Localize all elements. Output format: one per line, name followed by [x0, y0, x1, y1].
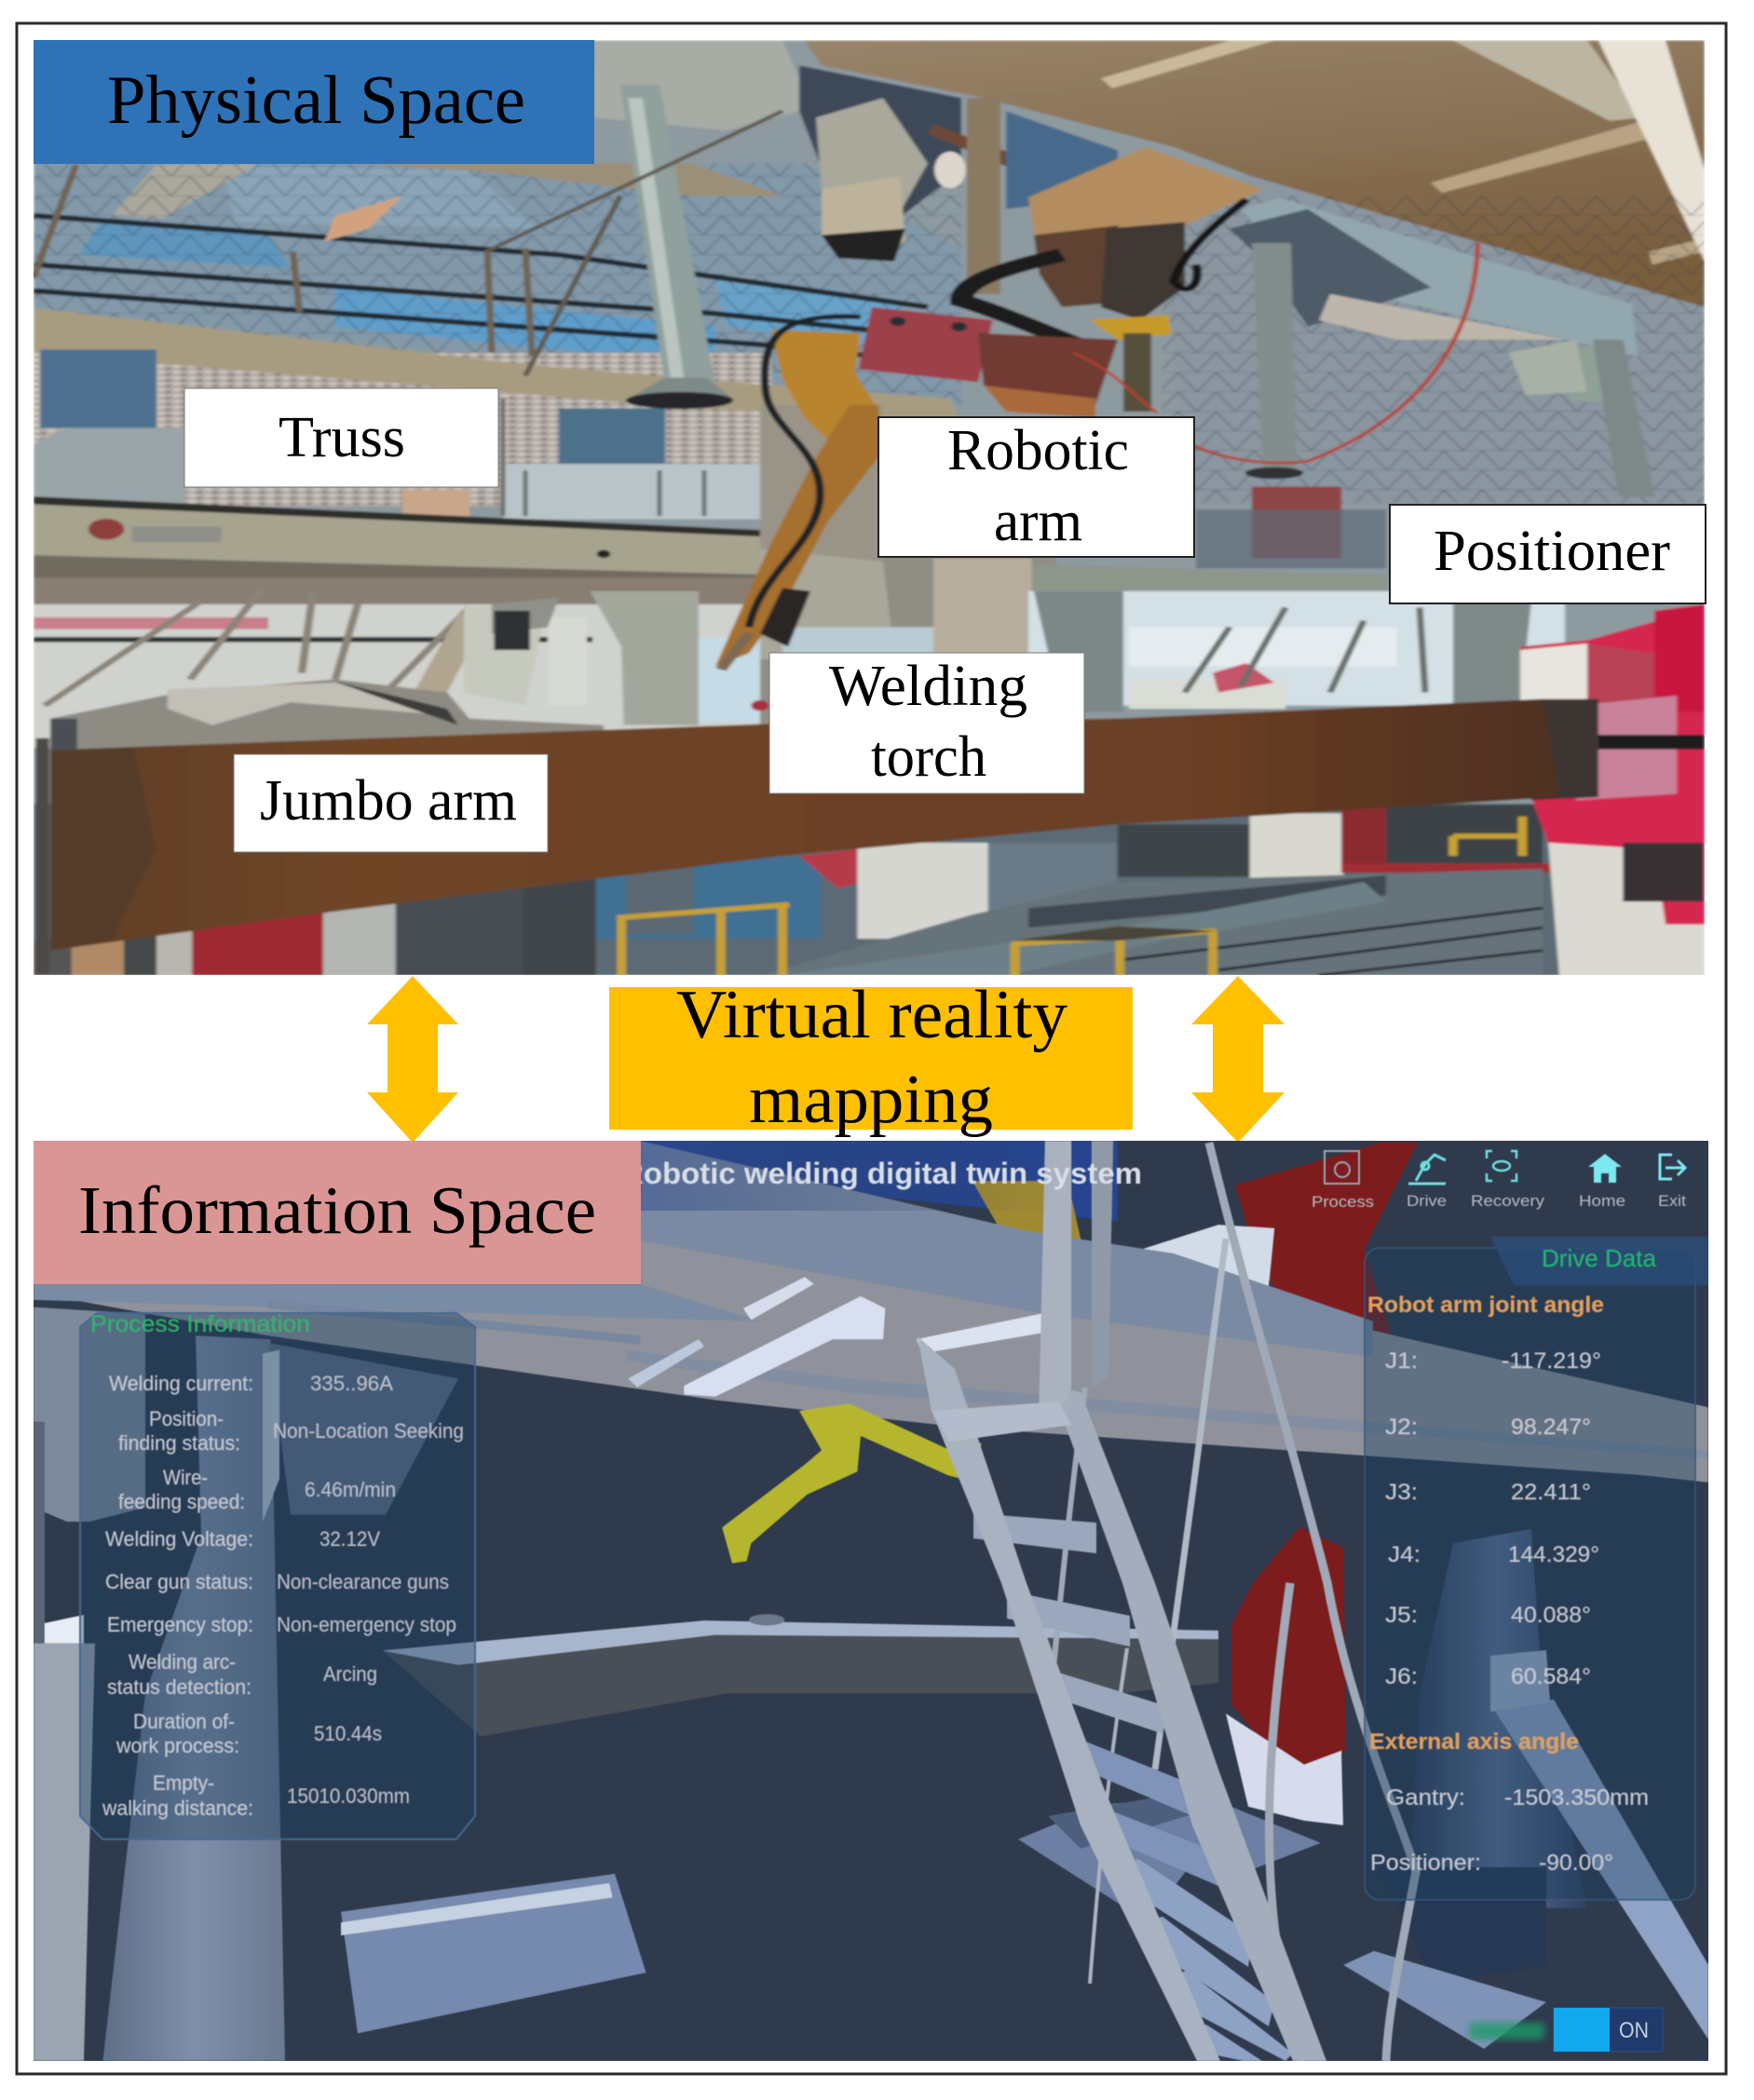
table of process values: Welding current:: [109, 1372, 253, 1395]
toolbar labels: [1312, 1192, 1686, 1211]
title text: Robotic welding digital twin system: [621, 1157, 1142, 1190]
heading: robot arm joint angle: Robot arm joint angle: [1367, 1293, 1604, 1318]
icon: process: [1325, 1151, 1359, 1184]
table of process values: [102, 1372, 464, 1820]
label: positioner: [1390, 505, 1706, 603]
label: virtual reality mapping: mapping: [749, 1062, 993, 1138]
label: virtual reality mapping: Virtual reality: [676, 977, 1067, 1053]
table of process values: 6.46m/min: [305, 1478, 396, 1501]
ladder rungs: [973, 1513, 1163, 1734]
table of process values: status detection:: [107, 1675, 252, 1699]
toolbar labels: Recovery: [1471, 1192, 1545, 1210]
joint angle values: 22.411°: [1511, 1480, 1591, 1505]
ladder thin rails: [1209, 1143, 1416, 2061]
blue glow behind the title: [641, 1141, 1118, 1221]
label: welding torch: Welding: [829, 655, 1027, 718]
joint angle values: J6:: [1385, 1664, 1418, 1689]
joint angle values: 98.247°: [1511, 1415, 1591, 1440]
label: jumbo arm: Jumbo arm: [260, 769, 517, 833]
roof lattice: [34, 163, 961, 405]
label: truss: Truss: [279, 406, 405, 469]
truss girder: [771, 384, 959, 416]
label: information space: Information Space: [78, 1172, 596, 1248]
ladder main rails: [918, 1336, 1220, 2061]
external axis values: -1503.350mm: [1504, 1785, 1649, 1810]
main truss: [34, 1193, 1708, 1483]
right base platform: [1379, 1867, 1546, 1984]
right side lattice and ducts: [1435, 229, 1684, 302]
external axis values: -90.00°: [1539, 1850, 1613, 1876]
table of process values: Emergency stop:: [107, 1613, 253, 1636]
under beam zone: [34, 603, 762, 749]
floor zone: [34, 804, 1705, 975]
drive data header band: [1490, 1237, 1708, 1285]
centre background: [758, 558, 1056, 726]
label: positioner: Positioner: [1434, 520, 1670, 583]
table of process values: Wire-: [163, 1466, 208, 1489]
table of process values: Non-emergency stop: [277, 1613, 456, 1636]
joint angle values: J5:: [1385, 1603, 1418, 1628]
label: information space: [34, 1141, 641, 1284]
joint angle values: -117.219°: [1502, 1348, 1601, 1374]
label: robotic arm: Robotic: [947, 419, 1129, 482]
table of process values: Welding arc-: [129, 1650, 236, 1673]
positioner: [1546, 841, 1705, 975]
left platform: [1018, 1795, 1321, 1912]
toolbar labels: Exit: [1658, 1192, 1686, 1210]
table of process values: Duration of-: [133, 1710, 235, 1733]
icon: home: [1588, 1154, 1622, 1183]
joint angle values: J4:: [1388, 1542, 1421, 1567]
photo base: [34, 40, 1705, 805]
white block: [1140, 1225, 1274, 1285]
label: physical space: Physical Space: [107, 62, 525, 139]
external axis values: [1370, 1785, 1649, 1876]
panel: information space 3D scene: [34, 1141, 1708, 2061]
diagonal light bar: [1490, 1700, 1708, 2039]
icon: drive robot: [1408, 1155, 1446, 1184]
upper duct and ceiling: [592, 40, 799, 130]
heading: external axis angle: External axis angle: [1369, 1729, 1579, 1755]
toolbar labels: Drive: [1407, 1192, 1447, 1210]
label: robotic arm: arm: [994, 490, 1082, 553]
joint angle values: 144.329°: [1508, 1542, 1599, 1567]
right column: [1408, 1529, 1587, 1908]
label: physical space: [34, 40, 594, 164]
label: welding torch: [769, 653, 1084, 793]
table of process values: Non-clearance guns: [277, 1570, 449, 1593]
joint angle values: 40.088°: [1511, 1603, 1591, 1628]
gold robot base: [972, 1181, 1081, 1240]
label: virtual reality mapping: [609, 977, 1133, 1138]
top header band: [34, 1141, 1058, 1211]
table of process values: 32.12V: [320, 1527, 380, 1551]
table of process values: 335..96A: [310, 1372, 393, 1395]
toolbar: process, drive, recovery, home, exit: [1312, 1151, 1686, 1211]
arrow: right bidirectional: [1191, 976, 1285, 1143]
panel: physical space photograph: [34, 40, 1705, 975]
table of process values: work process:: [116, 1734, 239, 1757]
label: jumbo arm: [234, 754, 548, 852]
red positioner lower: [1231, 1527, 1346, 1793]
table of process values: Empty-: [153, 1771, 214, 1795]
toggle: on switch: [1470, 2008, 1663, 2052]
main crane beam: [34, 498, 771, 575]
exhaust pipe: [620, 85, 715, 386]
table of process values: Arcing: [323, 1662, 377, 1686]
joint angle values: J1:: [1385, 1348, 1418, 1374]
external axis values: Positioner:: [1370, 1850, 1481, 1876]
table of process values: Non-Location Seeking: [273, 1419, 464, 1443]
table of process values: Position-: [149, 1407, 224, 1430]
robot arm yellow: [722, 1403, 982, 1564]
red positioner top: [1235, 1143, 1418, 1344]
table of process values: Welding Voltage:: [105, 1527, 253, 1551]
joint angle values: J3:: [1385, 1480, 1418, 1505]
steel plate behind beam: [50, 680, 604, 752]
left columns: [34, 1307, 145, 1522]
table of process values: feeding speed:: [118, 1490, 245, 1513]
icon: exit: [1660, 1155, 1685, 1179]
jumbo arm beam: [50, 699, 1559, 951]
joint angle values: [1385, 1348, 1601, 1689]
table of process values: 510.44s: [314, 1722, 382, 1745]
label: robotic arm: [878, 417, 1194, 557]
robot arm and hood: [1027, 146, 1263, 237]
toolbar labels: Process: [1312, 1193, 1374, 1211]
table of process values: walking distance:: [102, 1796, 253, 1820]
joint angle values: 60.584°: [1511, 1664, 1591, 1689]
icon: recovery: [1487, 1151, 1516, 1181]
floor plate band: [382, 1622, 1218, 1737]
arrow: left bidirectional: [367, 976, 458, 1143]
label: welding torch: torch: [871, 725, 986, 789]
wall and windows: [34, 353, 771, 507]
heading: process information: Process Information: [90, 1311, 310, 1337]
table of process values: 15010.030mm: [287, 1784, 410, 1808]
table of process values: finding status:: [118, 1431, 240, 1455]
handrails: [486, 111, 782, 375]
table of process values: Clear gun status:: [105, 1570, 253, 1593]
toggle: on switch: ON: [1619, 2018, 1649, 2043]
flanges: [743, 1277, 814, 1320]
heading: drive data: Drive Data: [1542, 1244, 1657, 1272]
joint angle values: J2:: [1385, 1415, 1418, 1440]
panel: process information: [80, 1311, 475, 1839]
toolbar labels: Home: [1579, 1192, 1625, 1210]
scene background: [34, 1141, 1708, 2061]
external axis values: Gantry:: [1386, 1785, 1465, 1810]
bottom-left box: [341, 1874, 646, 2034]
yellow stools: [617, 817, 1522, 975]
label: truss: [184, 388, 498, 487]
panel: drive data: [1365, 1237, 1708, 1900]
